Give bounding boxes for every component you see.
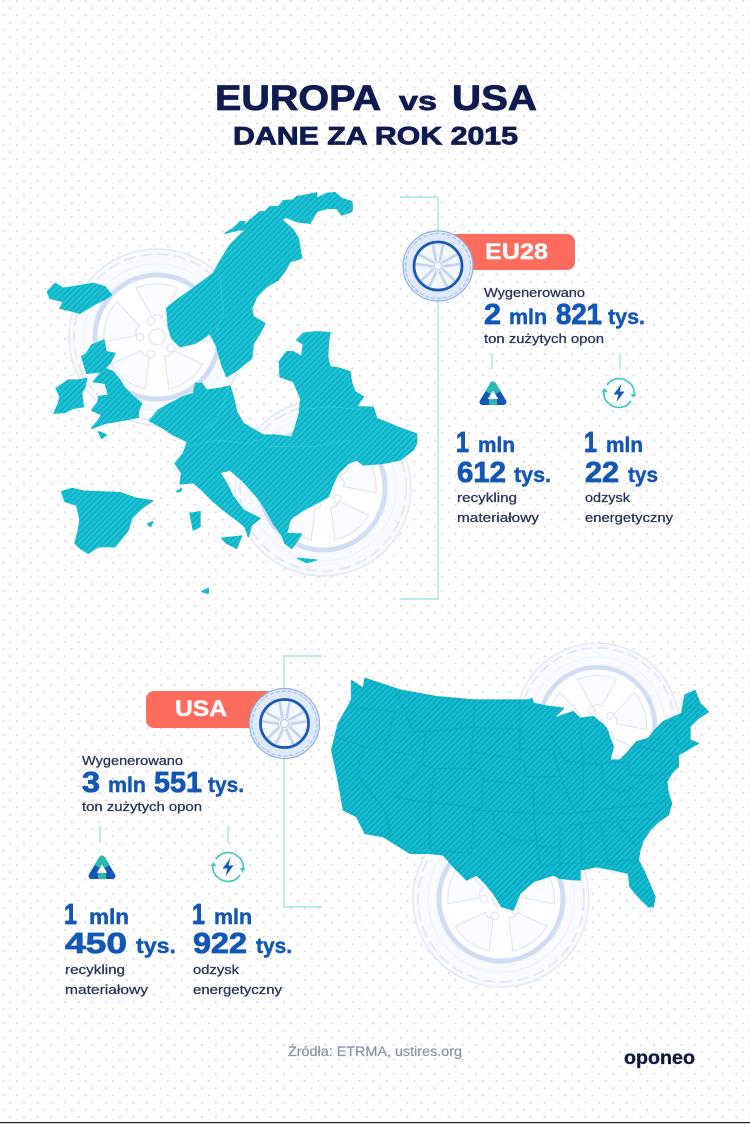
stat: energy EU: tys — [628, 464, 658, 487]
generated text EU: ton zużytych opon — [484, 331, 604, 346]
generated text USA: tys. — [208, 774, 244, 797]
title — [215, 79, 537, 118]
stat: energy EU: 1 — [584, 427, 597, 459]
stat: recycling USA: mln — [89, 906, 129, 929]
generated text USA: mln — [108, 774, 146, 797]
map: Europe — [47, 193, 417, 593]
source note: Źródła: ETRMA, ustires.org — [288, 1044, 462, 1059]
stat: energy USA: tys. — [256, 935, 292, 958]
stat: energy USA: mln — [214, 906, 252, 929]
panel: USA — [64, 688, 320, 997]
generated text EU: 2 — [484, 299, 501, 331]
stat: recycling EU: recykling — [457, 490, 517, 505]
stat: energy EU: 22 — [585, 457, 619, 489]
icon: recycling EU — [482, 384, 504, 402]
tire background: Europe lower — [235, 400, 411, 576]
stat: energy USA: 922 — [193, 928, 247, 960]
stat: recycling USA: materiałowy — [65, 982, 149, 997]
title: vs — [399, 86, 437, 116]
tire background: USA upper — [515, 643, 679, 807]
stat: recycling USA: 1 — [64, 899, 77, 931]
generated text USA: 551 — [154, 767, 202, 799]
USA badge — [146, 691, 280, 728]
stat: energy EU: energetyczny — [585, 510, 674, 525]
stat: energy EU — [584, 427, 674, 525]
USA badge: USA — [175, 696, 227, 721]
stat: energy USA: odzysk — [193, 962, 240, 977]
stat: recycling EU — [456, 427, 551, 525]
subtitle: DANE ZA ROK 2015 — [233, 122, 518, 150]
stat: energy USA — [192, 899, 292, 997]
state borders — [337, 690, 678, 870]
stat: energy USA: energetyczny — [193, 982, 283, 997]
stat: recycling USA — [64, 899, 176, 997]
icon: energy USA — [210, 853, 246, 881]
stat: recycling EU: materiałowy — [457, 510, 540, 525]
title: USA — [452, 79, 537, 118]
generated text EU: mln — [509, 306, 547, 329]
EU bracket lines — [400, 197, 438, 599]
stat: recycling EU: 612 — [457, 457, 506, 489]
generated text EU — [484, 285, 645, 346]
USA bracket lines — [284, 656, 322, 907]
panel: EU28 — [403, 231, 674, 525]
logo: oponeo: oponeo — [624, 1048, 695, 1069]
stat: recycling USA: tys. — [136, 935, 176, 958]
stat: recycling USA: 450 — [65, 928, 127, 960]
stat: energy EU: mln — [606, 434, 643, 457]
stat: recycling EU: tys. — [514, 464, 551, 487]
stat: energy EU: odzysk — [585, 490, 631, 505]
stat: energy USA: 1 — [192, 899, 205, 931]
stat: recycling EU: 1 — [456, 427, 469, 459]
generated text USA: Wygenerowano — [82, 753, 183, 768]
tire background: Europe upper — [69, 249, 245, 425]
stat: recycling EU: mln — [478, 434, 515, 457]
icon: EU tire — [403, 231, 473, 301]
icon: energy EU — [602, 379, 636, 407]
icon: recycling USA — [92, 858, 112, 876]
stat: recycling USA: recykling — [65, 962, 125, 977]
icon: USA tire — [250, 688, 320, 758]
stat: energy EU: . — [661, 471, 664, 485]
map: USA — [332, 678, 708, 910]
generated text EU: tys. — [608, 306, 645, 329]
title: EUROPA — [215, 79, 381, 118]
generated text EU: Wygenerowano — [484, 285, 585, 300]
tire background: USA lower — [413, 811, 589, 987]
generated text USA: 3 — [82, 767, 100, 799]
generated text EU: 821 — [556, 299, 602, 331]
EU28 badge — [440, 234, 575, 270]
generated text USA: ton zużytych opon — [82, 799, 202, 814]
EU28 badge: EU28 — [485, 239, 548, 264]
generated text USA — [82, 753, 244, 814]
